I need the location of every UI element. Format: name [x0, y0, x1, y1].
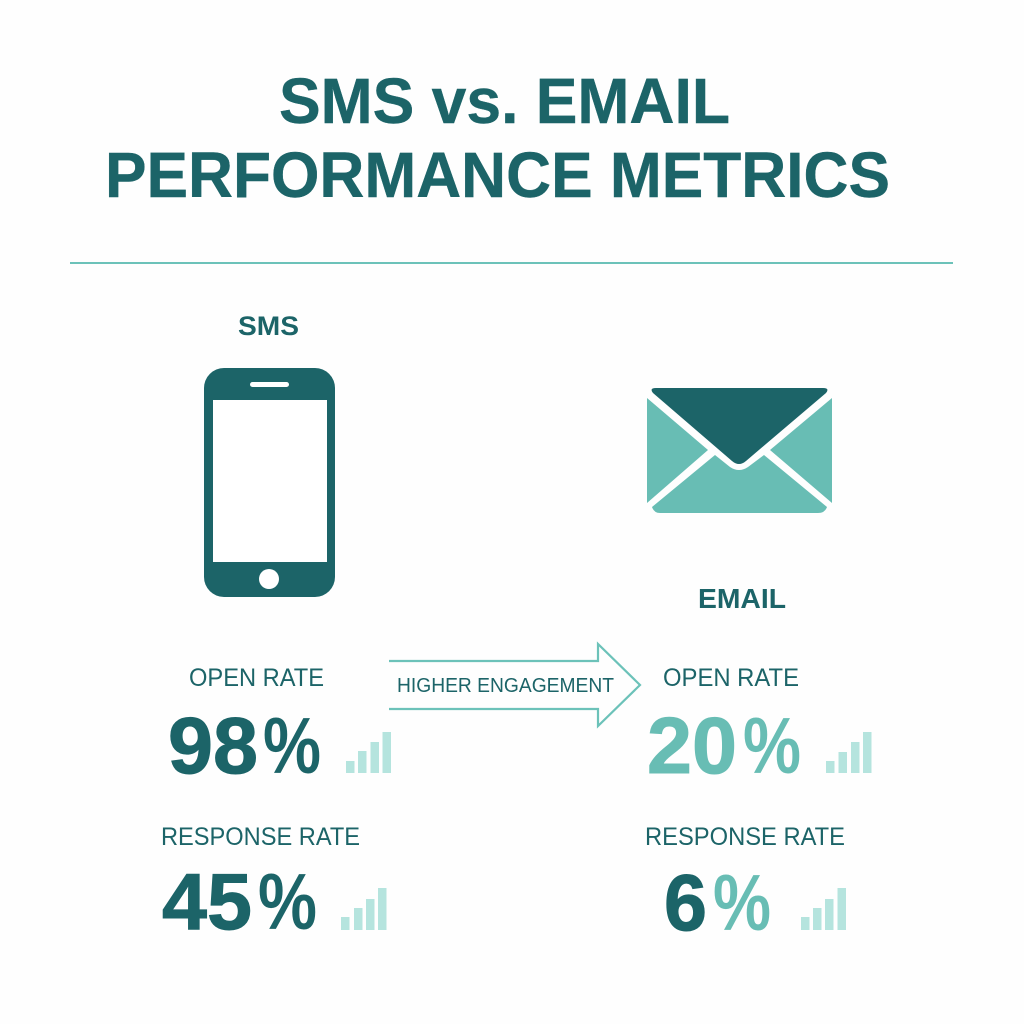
Email response rate value: % — [713, 858, 771, 947]
arrow: higher engagement: HIGHER ENGAGEMENT — [397, 675, 614, 697]
SMS open rate value: % — [263, 701, 321, 790]
icon: smartphone — [204, 368, 335, 597]
Email response rate label: RESPONSE RATE — [645, 823, 845, 851]
Email open rate value — [647, 701, 801, 790]
SMS open rate bars — [346, 732, 391, 773]
SMS response rate value — [162, 857, 317, 946]
SMS open rate value: 98 — [168, 701, 258, 790]
Email response rate bars — [801, 888, 846, 930]
Email response rate value: 6 — [664, 858, 707, 947]
SMS response rate label: RESPONSE RATE — [161, 823, 360, 851]
panel: Email column — [645, 388, 872, 947]
title: SMS vs. EMAIL — [279, 65, 730, 137]
SMS heading: SMS — [238, 311, 299, 341]
icon: envelope — [647, 388, 832, 513]
Email open rate value: % — [743, 701, 801, 790]
SMS response rate value: % — [258, 857, 317, 946]
panel: SMS column — [161, 311, 391, 946]
Email open rate bars — [826, 732, 872, 773]
Email open rate label: OPEN RATE — [663, 664, 799, 692]
SMS response rate value: 45 — [162, 857, 252, 946]
Email open rate value: 20 — [647, 701, 737, 790]
arrow: higher engagement — [389, 644, 640, 726]
Email heading: EMAIL — [698, 583, 786, 614]
SMS response rate bars — [341, 888, 386, 930]
title: PERFORMANCE METRICS — [105, 139, 890, 211]
Email response rate value — [664, 858, 771, 947]
SMS open rate label: OPEN RATE — [189, 664, 324, 692]
title — [105, 65, 890, 211]
SMS open rate value — [168, 701, 321, 790]
